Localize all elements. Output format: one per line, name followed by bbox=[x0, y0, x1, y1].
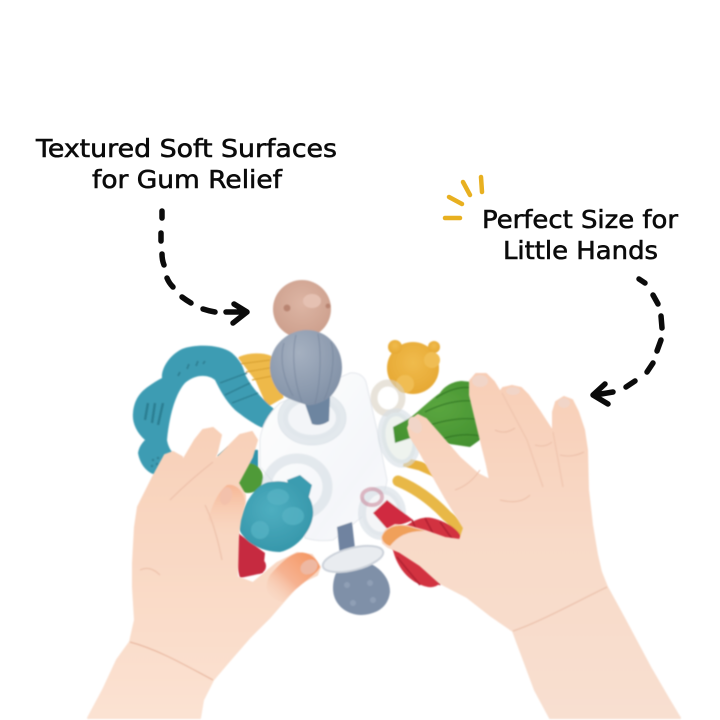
toy: white core bbox=[260, 373, 387, 541]
heading: textured soft surfaces: Textured Soft Surfaces bbox=[35, 134, 337, 163]
toy: red and green parts behind hand bbox=[217, 447, 462, 587]
toy: red stem bbox=[373, 500, 413, 530]
heading: perfect size bbox=[482, 205, 679, 265]
toy: clear rings bbox=[262, 383, 421, 536]
arrow: dashed curve to hand bbox=[593, 279, 662, 404]
toy: gray stem and ribbed ball bbox=[270, 330, 342, 425]
hand: left bbox=[88, 428, 320, 718]
toy: pink ball bbox=[273, 280, 331, 338]
accent: yellow sparkle rays bbox=[445, 177, 482, 218]
arrow: dashed curve to pink ball bbox=[161, 211, 247, 323]
toy: yellow bear ball bbox=[387, 340, 440, 394]
toy: yellow parts behind bbox=[240, 355, 463, 533]
hand: right bbox=[382, 374, 680, 718]
hand detail: nails and creases bbox=[382, 375, 607, 631]
hand detail: finger tips and creases bbox=[130, 462, 320, 680]
heading: perfect size: Perfect Size for bbox=[482, 205, 679, 234]
toy: teething toy bbox=[133, 280, 484, 615]
toy: teal bumpy ball bbox=[238, 475, 313, 552]
heading: textured soft surfaces bbox=[35, 134, 337, 194]
heading: textured soft surfaces: for Gum Relief bbox=[92, 165, 283, 194]
toy: gray stem and dotted ball bbox=[320, 522, 390, 615]
toy: green ribbed bulb bbox=[393, 381, 484, 447]
toy: teal teether handle bbox=[133, 346, 278, 475]
heading: perfect size: Little Hands bbox=[503, 236, 658, 265]
